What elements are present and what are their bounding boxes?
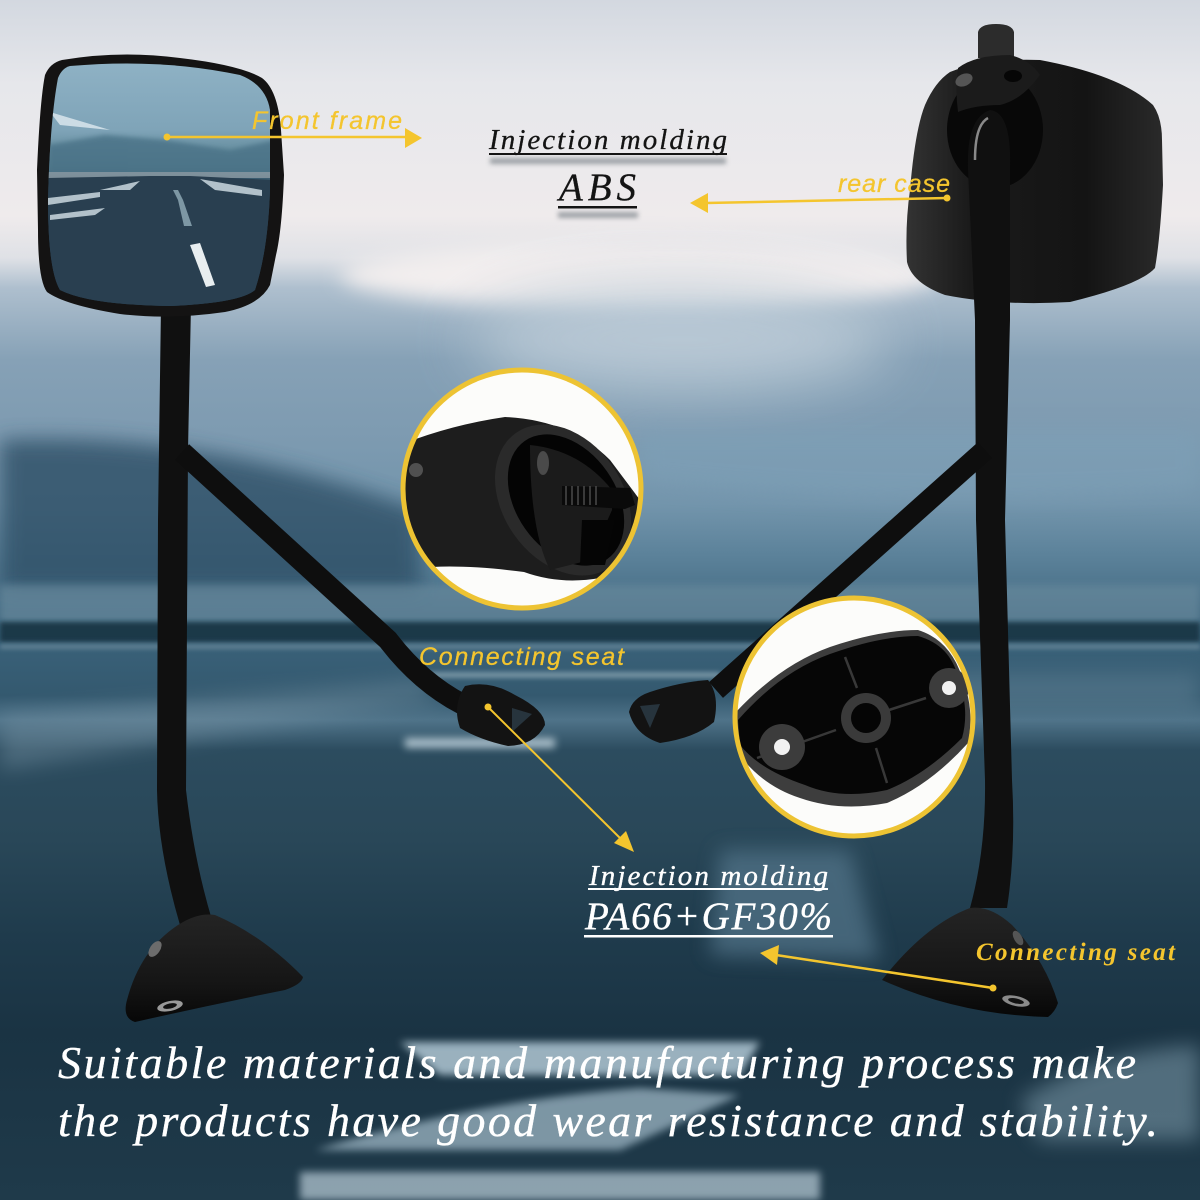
detail circle: connecting seat underside [735,598,973,836]
mirror strut [182,452,462,704]
arrow: front frame [164,128,422,148]
mirror glass [48,64,270,306]
swivel recess [947,72,1043,188]
callout: Injection molding ABS [488,124,727,218]
mirror frame [37,54,284,317]
left mirror: front view [37,54,545,1022]
label: rear case [690,170,950,213]
caption text: the products have good wear resistance and stability. [58,1095,1158,1146]
mirror arm [157,305,212,925]
label: Connecting seat left [419,643,634,852]
label: Connecting seat left: Connecting seat [419,643,625,671]
label: Front frame: Front frame [252,107,402,135]
arrow: connecting seat down [484,704,634,852]
mirror arm [968,110,1013,908]
rear case [906,60,1163,303]
mirror foot [126,914,303,1022]
callout: Injection molding PA66+GF30%: Injection molding [588,860,828,892]
mirror foot [882,908,1058,1017]
label: Connecting seat right: Connecting seat [976,939,1176,966]
callout: Injection molding PA66+GF30%: PA66+GF30% [584,895,832,938]
swivel mount [956,55,1040,112]
arrow: connecting seat to material [760,945,996,992]
arrow: rear case [690,193,950,213]
label: Connecting seat right [760,939,1176,992]
caption text: Suitable materials and manufacturing process make [58,1037,1136,1088]
callout: Injection molding ABS: ABS [556,166,636,209]
callout: Injection molding PA66+GF30% [584,860,833,938]
caption text [58,1037,1158,1146]
label: rear case: rear case [838,170,950,198]
callout: Injection molding ABS: Injection molding [488,124,727,156]
connecting seat [457,684,545,746]
detail circle: threaded connecting seat [400,370,659,608]
mirror stalk cap [978,24,1014,58]
right mirror: rear view [629,24,1163,1017]
connecting seat [629,680,716,743]
mirror strut [716,450,985,690]
label: Front frame [164,107,422,148]
